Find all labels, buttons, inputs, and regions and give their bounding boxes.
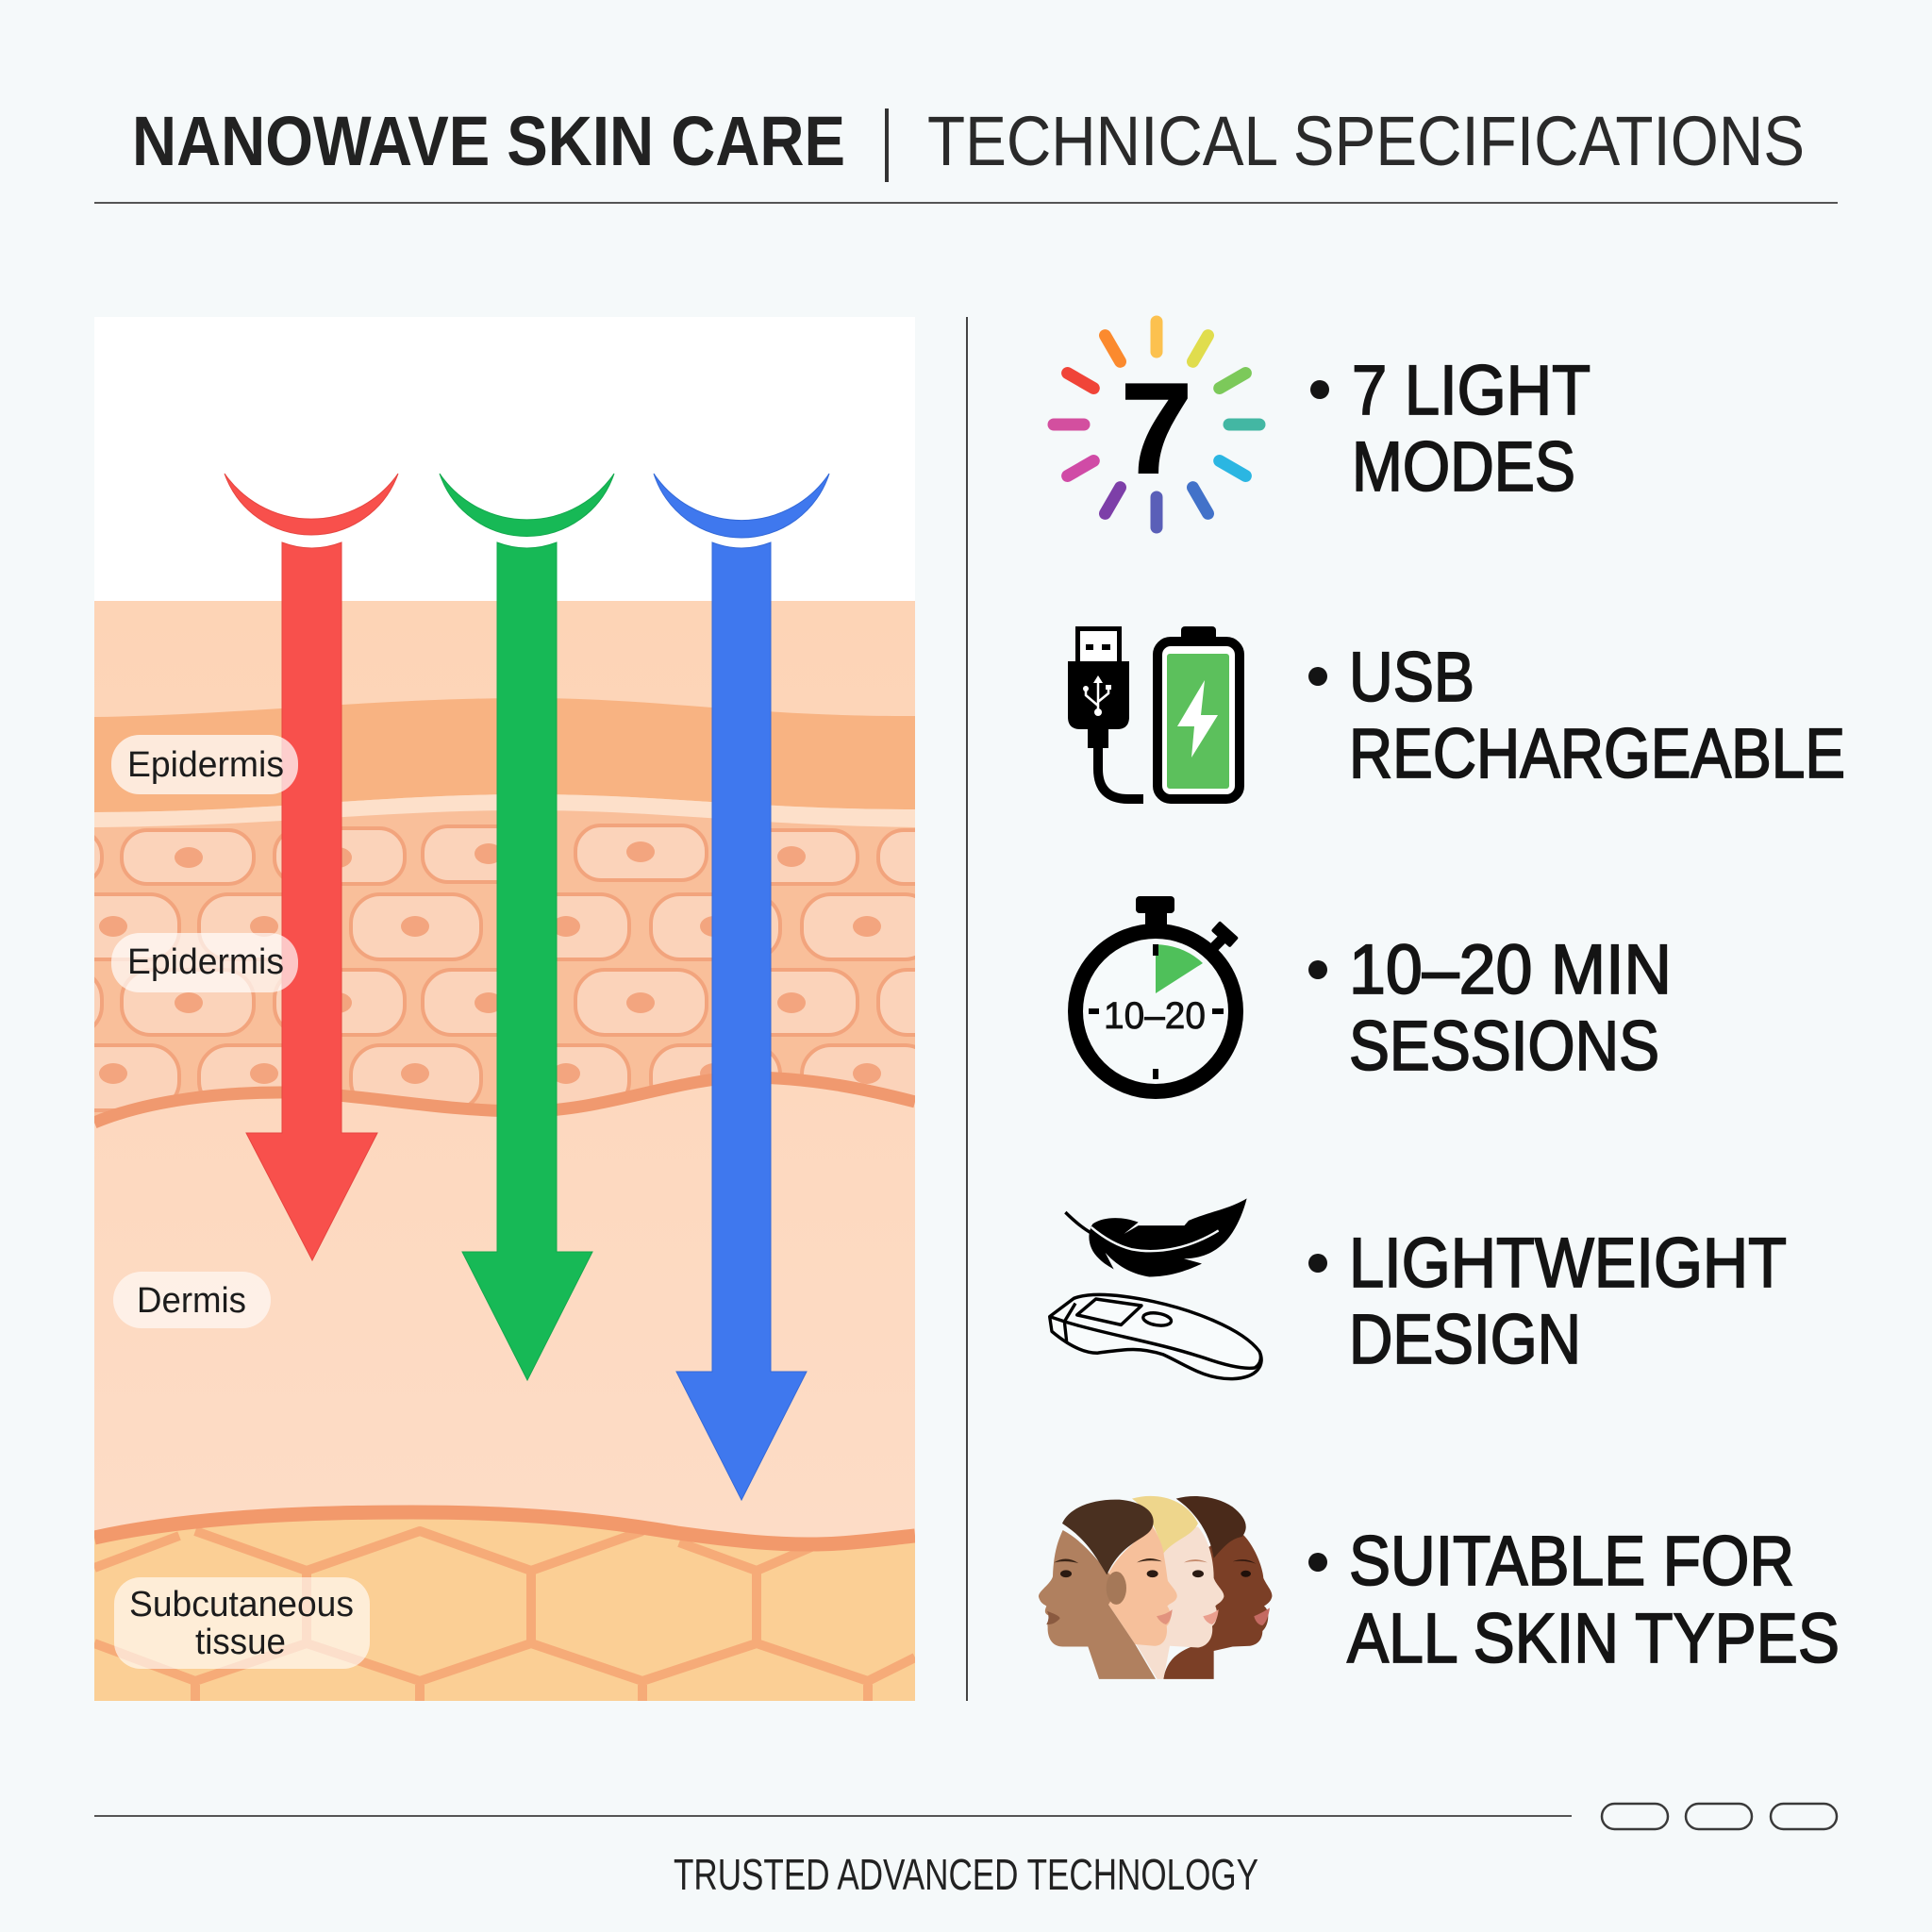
- title: document type: TECHNICAL SPECIFICATIONS: [927, 102, 1805, 180]
- brown skin hair: [1062, 1500, 1154, 1574]
- spec text: session length: 10–20 MIN: [1349, 930, 1672, 1008]
- blonde hair: [1132, 1496, 1198, 1554]
- footer tagline: TRUSTED ADVANCED TECHNOLOGY: [674, 1850, 1258, 1899]
- label: epidermis upper: Epidermis: [127, 745, 284, 785]
- label: dermis: Dermis: [137, 1281, 246, 1321]
- label: epidermis upper: [111, 735, 298, 794]
- label: epidermis lower: [111, 933, 298, 992]
- device outline: [1050, 1294, 1261, 1379]
- spec text: usb rechargeable: RECHARGEABLE: [1349, 714, 1845, 792]
- icon: feather and device: [1050, 1198, 1261, 1379]
- peach skin face: [1107, 1524, 1177, 1646]
- basal membrane line: [94, 1077, 915, 1123]
- epidermal cell layer: [94, 810, 915, 1116]
- subcutaneous boundary line: [94, 1512, 915, 1544]
- icon: usb and battery: [1068, 626, 1240, 799]
- dark skin hair: [1176, 1496, 1246, 1558]
- icon: faces of diverse skin types: [1039, 1496, 1272, 1679]
- pale skin neck and face: [1135, 1526, 1224, 1679]
- epidermis band: [94, 698, 915, 812]
- spec text: suitable for all skin types: SUITABLE FOR: [1349, 1522, 1794, 1600]
- icon: seven light modes: [1054, 322, 1259, 527]
- icon: stopwatch: 10–20: [1104, 995, 1206, 1037]
- icon: seven light modes: 7: [1121, 357, 1192, 500]
- facial features: [1046, 1558, 1270, 1625]
- spec text: lightweight design: LIGHTWEIGHT: [1349, 1224, 1787, 1302]
- label: epidermis lower: Epidermis: [127, 942, 284, 982]
- panel: skin cross-section diagram: [94, 317, 915, 1701]
- title: [132, 102, 1805, 182]
- title: product name: NANOWAVE SKIN CARE: [132, 102, 845, 180]
- label: subcutaneous tissue: Subcutaneous: [129, 1585, 354, 1624]
- spec text: usb rechargeable: USB: [1349, 638, 1474, 716]
- spec text: 7 light modes: MODES: [1352, 427, 1575, 506]
- brown skin profile: [1039, 1530, 1156, 1679]
- spec text: suitable for all skin types: ALL SKIN TYPES: [1347, 1599, 1840, 1677]
- icon: stopwatch: [1075, 896, 1239, 1091]
- arrow: blue light: [654, 474, 829, 1500]
- spec text: usb rechargeable: [1308, 638, 1845, 792]
- battery: [1158, 626, 1240, 799]
- usb plug: [1068, 628, 1143, 799]
- spec text: suitable for all skin types: [1308, 1522, 1840, 1677]
- light strip below epidermis band: [94, 794, 915, 828]
- label: subcutaneous tissue: [114, 1577, 370, 1669]
- feather: [1065, 1198, 1247, 1277]
- spec text: 7 light modes: [1310, 351, 1591, 506]
- brown skin ear: [1107, 1572, 1126, 1605]
- spec text: session length: [1308, 930, 1672, 1085]
- dermis base layer: [94, 601, 915, 1544]
- spec text: session length: SESSIONS: [1349, 1007, 1659, 1085]
- arrow: green light: [440, 474, 614, 1380]
- spec text: lightweight design: DESIGN: [1349, 1300, 1581, 1378]
- dark skin profile: [1163, 1533, 1272, 1679]
- footer pill indicators: [1602, 1804, 1837, 1829]
- spec text: 7 light modes: 7 LIGHT: [1352, 351, 1591, 429]
- subcutaneous fat layer: [94, 1519, 915, 1701]
- spec text: lightweight design: [1308, 1224, 1787, 1378]
- label: dermis: [113, 1272, 271, 1328]
- arrow: red light: [225, 474, 398, 1260]
- title separator: [885, 108, 889, 182]
- label: subcutaneous tissue: tissue: [195, 1623, 286, 1662]
